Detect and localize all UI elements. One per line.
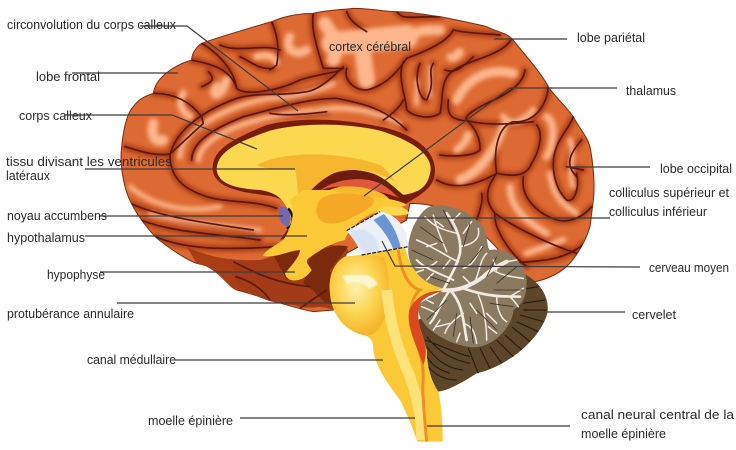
sulcus shadows [125, 12, 592, 267]
line: lobe parietal [494, 38, 567, 40]
label: cervelet: cervelet [632, 308, 677, 322]
line: thalamus [364, 88, 617, 196]
line: circonvolution [140, 26, 298, 111]
label: hypophyse: hypophyse [47, 268, 105, 282]
label: protuberance: protubérance annulaire [7, 307, 134, 321]
central canal [398, 250, 427, 442]
cortex surface modelling [125, 12, 592, 267]
line: protuberance [117, 302, 355, 304]
label: colliculus inferieur: colliculus inférieur [609, 205, 707, 219]
line: canal medullaire [175, 359, 383, 361]
label: lobe frontal: lobe frontal [36, 70, 100, 84]
temporal lobe [230, 245, 348, 308]
gyri highlights [130, 23, 577, 253]
cerebellum arbor vitae [408, 205, 527, 347]
line: moelle epiniere [240, 417, 415, 419]
thalamus [288, 186, 408, 248]
lobe shading [187, 247, 347, 310]
line: hypophyse [100, 271, 295, 273]
label: tissu: tissu divisant les ventricules [6, 155, 172, 169]
line: cerveau moyen [382, 241, 640, 267]
corpus callosum [217, 125, 431, 233]
line: lobe frontal [72, 72, 178, 74]
outer cerebellum folia [418, 270, 548, 392]
callosal margin [213, 120, 435, 240]
label: cortex: cortex cérébral [329, 40, 411, 54]
label: corps calleux: corps calleux [19, 109, 93, 123]
hypothalamus and pituitary [263, 190, 407, 280]
fourth ventricle [409, 291, 443, 365]
light spinal band [387, 290, 422, 440]
label: moelle epiniere: moelle épinière [148, 414, 233, 428]
brain silhouette [121, 8, 594, 312]
nucleus accumbens [279, 207, 291, 227]
line: tissu [85, 168, 295, 170]
label: canal medullaire: canal médullaire [87, 353, 176, 367]
label: canal neural: canal neural central de la [581, 408, 734, 422]
line: colliculus [405, 217, 610, 219]
label: colliculus superieur: colliculus supérieur et [609, 186, 730, 200]
cerebral hemisphere [121, 8, 594, 312]
fornix tissue [257, 154, 395, 207]
label: lobe occipital: lobe occipital [660, 162, 732, 176]
brainstem [330, 247, 443, 442]
line: noyau accumbens [100, 215, 283, 217]
label: hypothalamus: hypothalamus [7, 231, 85, 245]
line: lobe occipital [567, 166, 650, 168]
brainstem, pituitary and cerebellum [230, 190, 548, 442]
label: thalamus: thalamus [626, 84, 676, 98]
label: lobe parietal: lobe pariétal [577, 31, 645, 45]
line: canal neural [427, 425, 570, 427]
label: lateraux: latéraux [6, 169, 51, 183]
sulci [125, 12, 592, 267]
label: noyau accumbens: noyau accumbens [7, 209, 107, 223]
label: circonvolution: circonvolution du corps calleux [7, 18, 177, 32]
line: hypothalamus [85, 235, 307, 237]
pons [330, 255, 389, 335]
leader lines [65, 26, 650, 426]
label: moelle epiniere 2: moelle épinière [581, 427, 666, 441]
label: cerveau moyen: cerveau moyen [649, 261, 729, 275]
midbrain [347, 212, 408, 255]
line: cervelet [547, 311, 625, 313]
line: corps calleux [65, 115, 257, 149]
ventricle [317, 171, 410, 200]
